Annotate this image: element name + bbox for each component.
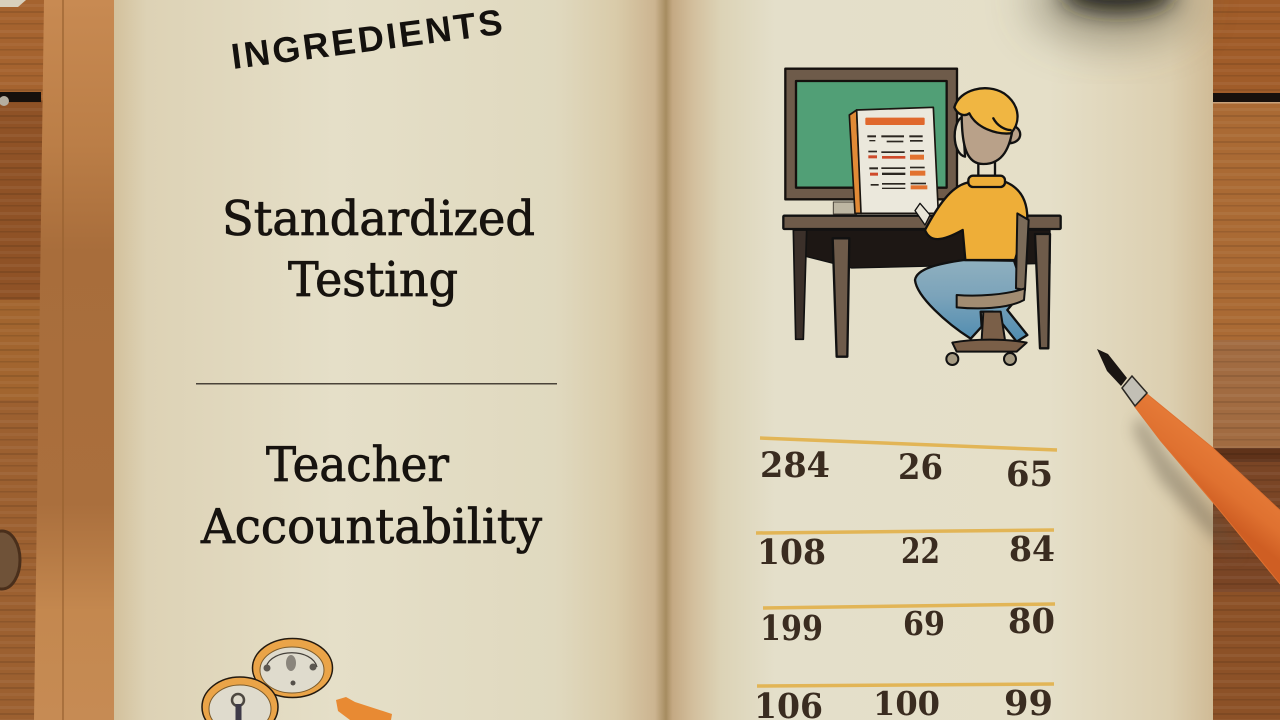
student neck <box>978 162 995 180</box>
student hand <box>915 203 930 225</box>
text: teacher accountability: Accountability <box>200 499 542 555</box>
student right ear <box>1010 125 1020 143</box>
row 2: 84 <box>1009 529 1055 570</box>
row 2 <box>756 529 1055 573</box>
text: teacher accountability: Teacher <box>266 437 449 493</box>
row 2: 108 <box>757 532 826 573</box>
icon: lower coin <box>202 677 278 720</box>
text: teacher accountability <box>200 437 542 555</box>
student left ear <box>955 117 965 157</box>
shadow at top right <box>1032 0 1192 38</box>
icon: desk <box>783 216 1061 357</box>
row 1: 284 <box>760 445 830 486</box>
row 1: 26 <box>898 447 943 488</box>
student hair <box>954 88 1018 134</box>
book cover <box>34 0 114 720</box>
row 1: 65 <box>1006 454 1053 495</box>
icon: upper coin <box>252 638 332 698</box>
pen shadow <box>1133 415 1240 560</box>
icon: monitor <box>785 69 957 214</box>
table of scores <box>754 438 1057 720</box>
row 3 <box>760 601 1055 649</box>
text: standardized testing: Testing <box>288 252 458 308</box>
text: standardized testing: Standardized <box>222 191 535 247</box>
panel: left page <box>114 0 666 720</box>
row 2: 22 <box>901 531 940 572</box>
icon: orange marker <box>336 697 392 720</box>
icon: coins <box>202 638 392 720</box>
row 4 <box>754 683 1054 720</box>
row 1 <box>760 438 1057 495</box>
icon: office chair <box>946 213 1029 365</box>
illustration: student at computer desk <box>783 69 1061 365</box>
student collar <box>968 176 1005 187</box>
row 3: 80 <box>1008 601 1055 642</box>
icon: orange pen <box>1097 349 1280 590</box>
row 3: 69 <box>903 604 945 643</box>
row 3: 199 <box>760 608 823 649</box>
student sweater <box>925 182 1027 260</box>
icon: student <box>915 88 1027 342</box>
icon: test paper <box>849 107 938 213</box>
panel: right page <box>666 0 1213 720</box>
student head <box>962 113 1014 164</box>
text: standardized testing <box>222 191 535 308</box>
student legs <box>915 260 1027 342</box>
heading: ingredients: INGREDIENTS <box>229 1 505 77</box>
